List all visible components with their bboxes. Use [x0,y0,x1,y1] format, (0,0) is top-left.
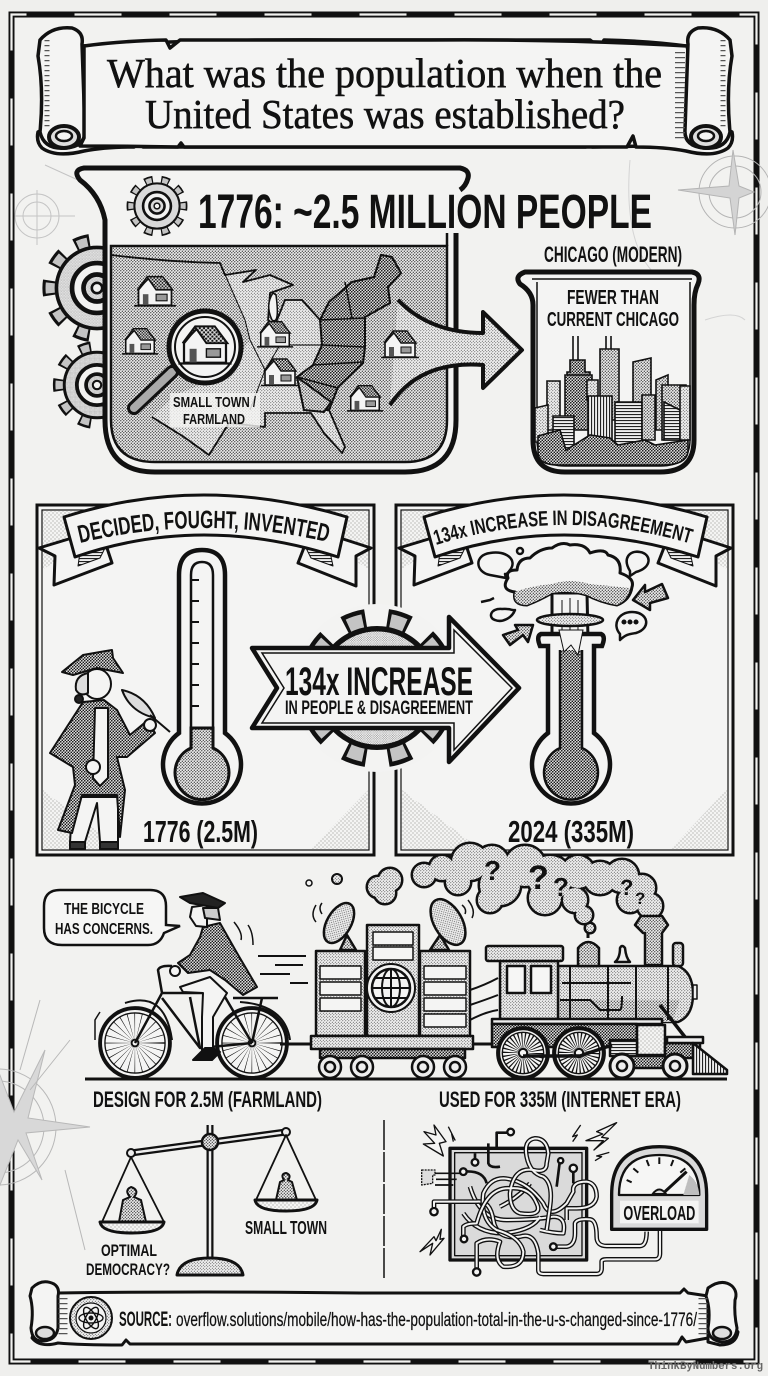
text: fewer than current Chicago: FEWER THAN [567,287,659,309]
label: overload: OVERLOAD [623,1203,695,1225]
question marks: ? [484,855,501,886]
thermometer 2024 [532,630,610,803]
chassis [492,1019,662,1024]
figure: founder with quill [50,650,170,849]
label: 1776 2.5M: 1776 (2.5M) [143,814,258,849]
funnel and domes [635,916,668,965]
text: 134x increase: 134x INCREASE [285,660,473,704]
question marks [484,855,645,908]
label: optimal democracy: DEMOCRACY? [86,1260,170,1279]
label: optimal democracy: OPTIMAL [101,1241,157,1260]
title text: United States was established? [145,91,625,137]
compass rose left [15,165,100,245]
speech bubble: the bicycle has concerns: HAS CONCERNS. [55,921,153,938]
seal icon [70,1297,112,1339]
label: small town farmland: SMALL TOWN / [173,394,257,411]
label: optimal democracy [86,1241,170,1279]
arrow to Chicago [390,300,522,405]
text: fewer than current Chicago: CURRENT CHICAGO [547,309,679,331]
ribbon: decided fought invented: DECIDED, FOUGHT, INVENTED [77,510,330,543]
left pan and weight [100,1157,164,1233]
ribbon: 134x increase in disagreement [398,494,732,588]
label: small town: SMALL TOWN [245,1218,327,1238]
label: Chicago modern: CHICAGO (MODERN) [544,242,682,267]
question marks: ? [528,859,549,897]
ground line [85,1078,727,1080]
compass rose bottom left [0,1000,90,1250]
lightning sparks [420,1123,617,1255]
text: in people and disagreement: IN PEOPLE & DISAGREEMENT [285,698,473,719]
panel: Chicago beaker [518,272,699,472]
panel: 1776 thermometer [36,494,376,856]
ribbon: 134x increase in disagreement: 134x INCREASE IN DISAGREEMENT [434,510,694,545]
speech bubble: the bicycle has concerns [44,890,180,945]
label: small town farmland [170,393,260,428]
label: design for 2.5M: DESIGN FOR 2.5M (FARMLAND) [93,1087,322,1112]
gears behind beaker [51,242,143,422]
title text: What was the population when the [107,50,662,96]
mushroom cloud [505,544,632,640]
speech bubbles and arrows [478,548,668,645]
right pan and weight [255,1135,317,1211]
cab [500,961,558,1019]
skyline [535,336,690,465]
panel: 2024 thermometer [394,494,734,856]
icon: magnifying glass with house [134,311,241,408]
compass rose top right [629,150,768,320]
map of eastern United States [111,255,401,455]
steam locomotive [486,916,727,1078]
smoke cloud with question marks [306,844,662,932]
icon: gear beside heading [131,180,183,232]
thermometer 1776 [163,550,241,803]
icons: small houses [122,277,419,411]
arrow: 134x increase [252,617,519,762]
satellite dishes [313,893,473,951]
source scroll footer [30,1282,738,1345]
overload gauge [612,1147,707,1229]
wheels [498,1028,687,1078]
speech bubble: the bicycle has concerns: THE BICYCLE [64,901,144,918]
globe icon [367,964,415,1012]
label: small town farmland: FARMLAND [183,411,245,428]
title scroll banner [38,28,732,154]
title text [107,50,662,137]
divider [383,1120,385,1278]
text: fewer than current Chicago [547,287,679,331]
source text: SOURCE: [119,1308,172,1331]
balance scale [100,1125,317,1275]
watermark: ThinkByNumbers.org [648,1361,763,1373]
question marks: ? [553,872,569,902]
train car: servers [280,893,498,1078]
question marks: ? [620,875,633,900]
panel: 1776 population beaker [77,168,468,472]
ribbon: decided fought invented [38,494,372,588]
label: 2024 335M: 2024 (335M) [508,814,634,849]
boiler [558,966,693,1022]
figure: rider on bicycle [95,893,308,1078]
bicycle [95,966,290,1078]
icon: central gear [293,604,461,772]
server racks [316,925,470,1036]
rider [170,893,257,1060]
flatcar and wheels [280,1036,495,1078]
tangled circuit board [420,1123,660,1276]
question marks: ? [635,889,645,908]
